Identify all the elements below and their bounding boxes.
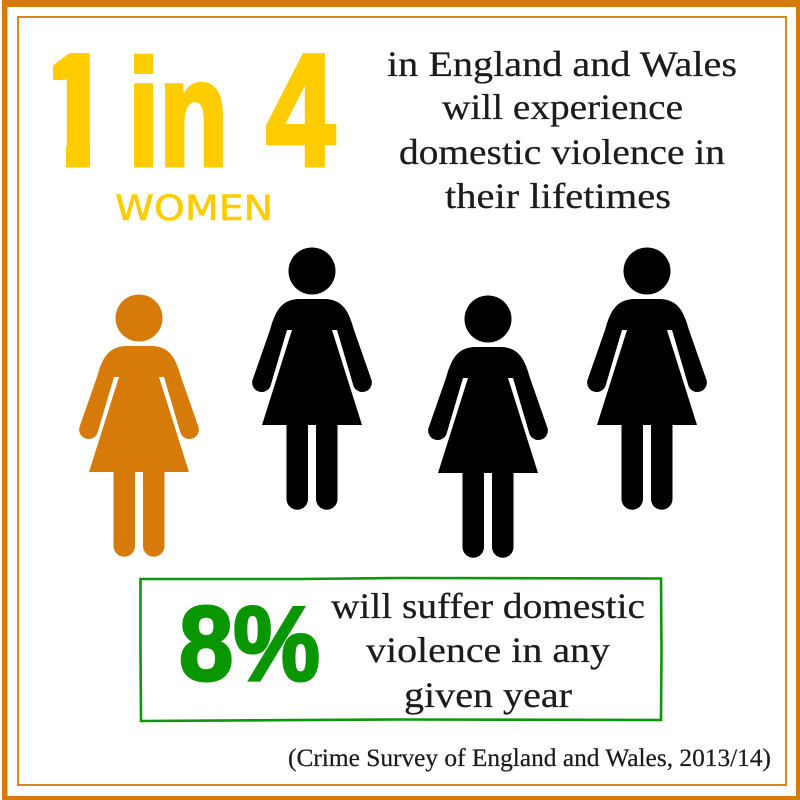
callout text: violence in any [366, 630, 610, 670]
source citation: (Crime Survey of England and Wales, 2013/14) [288, 745, 771, 772]
text block: in England and Wales: in England and Wales [387, 44, 737, 84]
icon: black woman 3 [428, 296, 548, 558]
icon: black woman 2 [252, 248, 372, 510]
headline: 1 in 4 [53, 53, 336, 168]
text block: in England and Wales: their lifetimes [445, 176, 671, 216]
callout box [140, 578, 662, 721]
label: WOMEN: WOMEN [115, 189, 273, 229]
green frame [140, 578, 662, 721]
stat: 8%: 8% [179, 585, 320, 703]
headline: 1 in 4: 1 [37, 21, 113, 199]
callout text [331, 586, 645, 715]
callout text: given year [404, 675, 572, 715]
text block: in England and Wales: domestic violence in [399, 132, 725, 172]
text block: in England and Wales: will experience [442, 87, 683, 127]
text block: in England and Wales [387, 44, 737, 216]
headline: 1 in 4: 4 [266, 21, 335, 199]
icon: black woman 4 [587, 248, 707, 510]
headline: 1 in 4: in [128, 29, 228, 197]
callout text: will suffer domestic [331, 586, 645, 626]
icon: orange woman [79, 294, 199, 557]
